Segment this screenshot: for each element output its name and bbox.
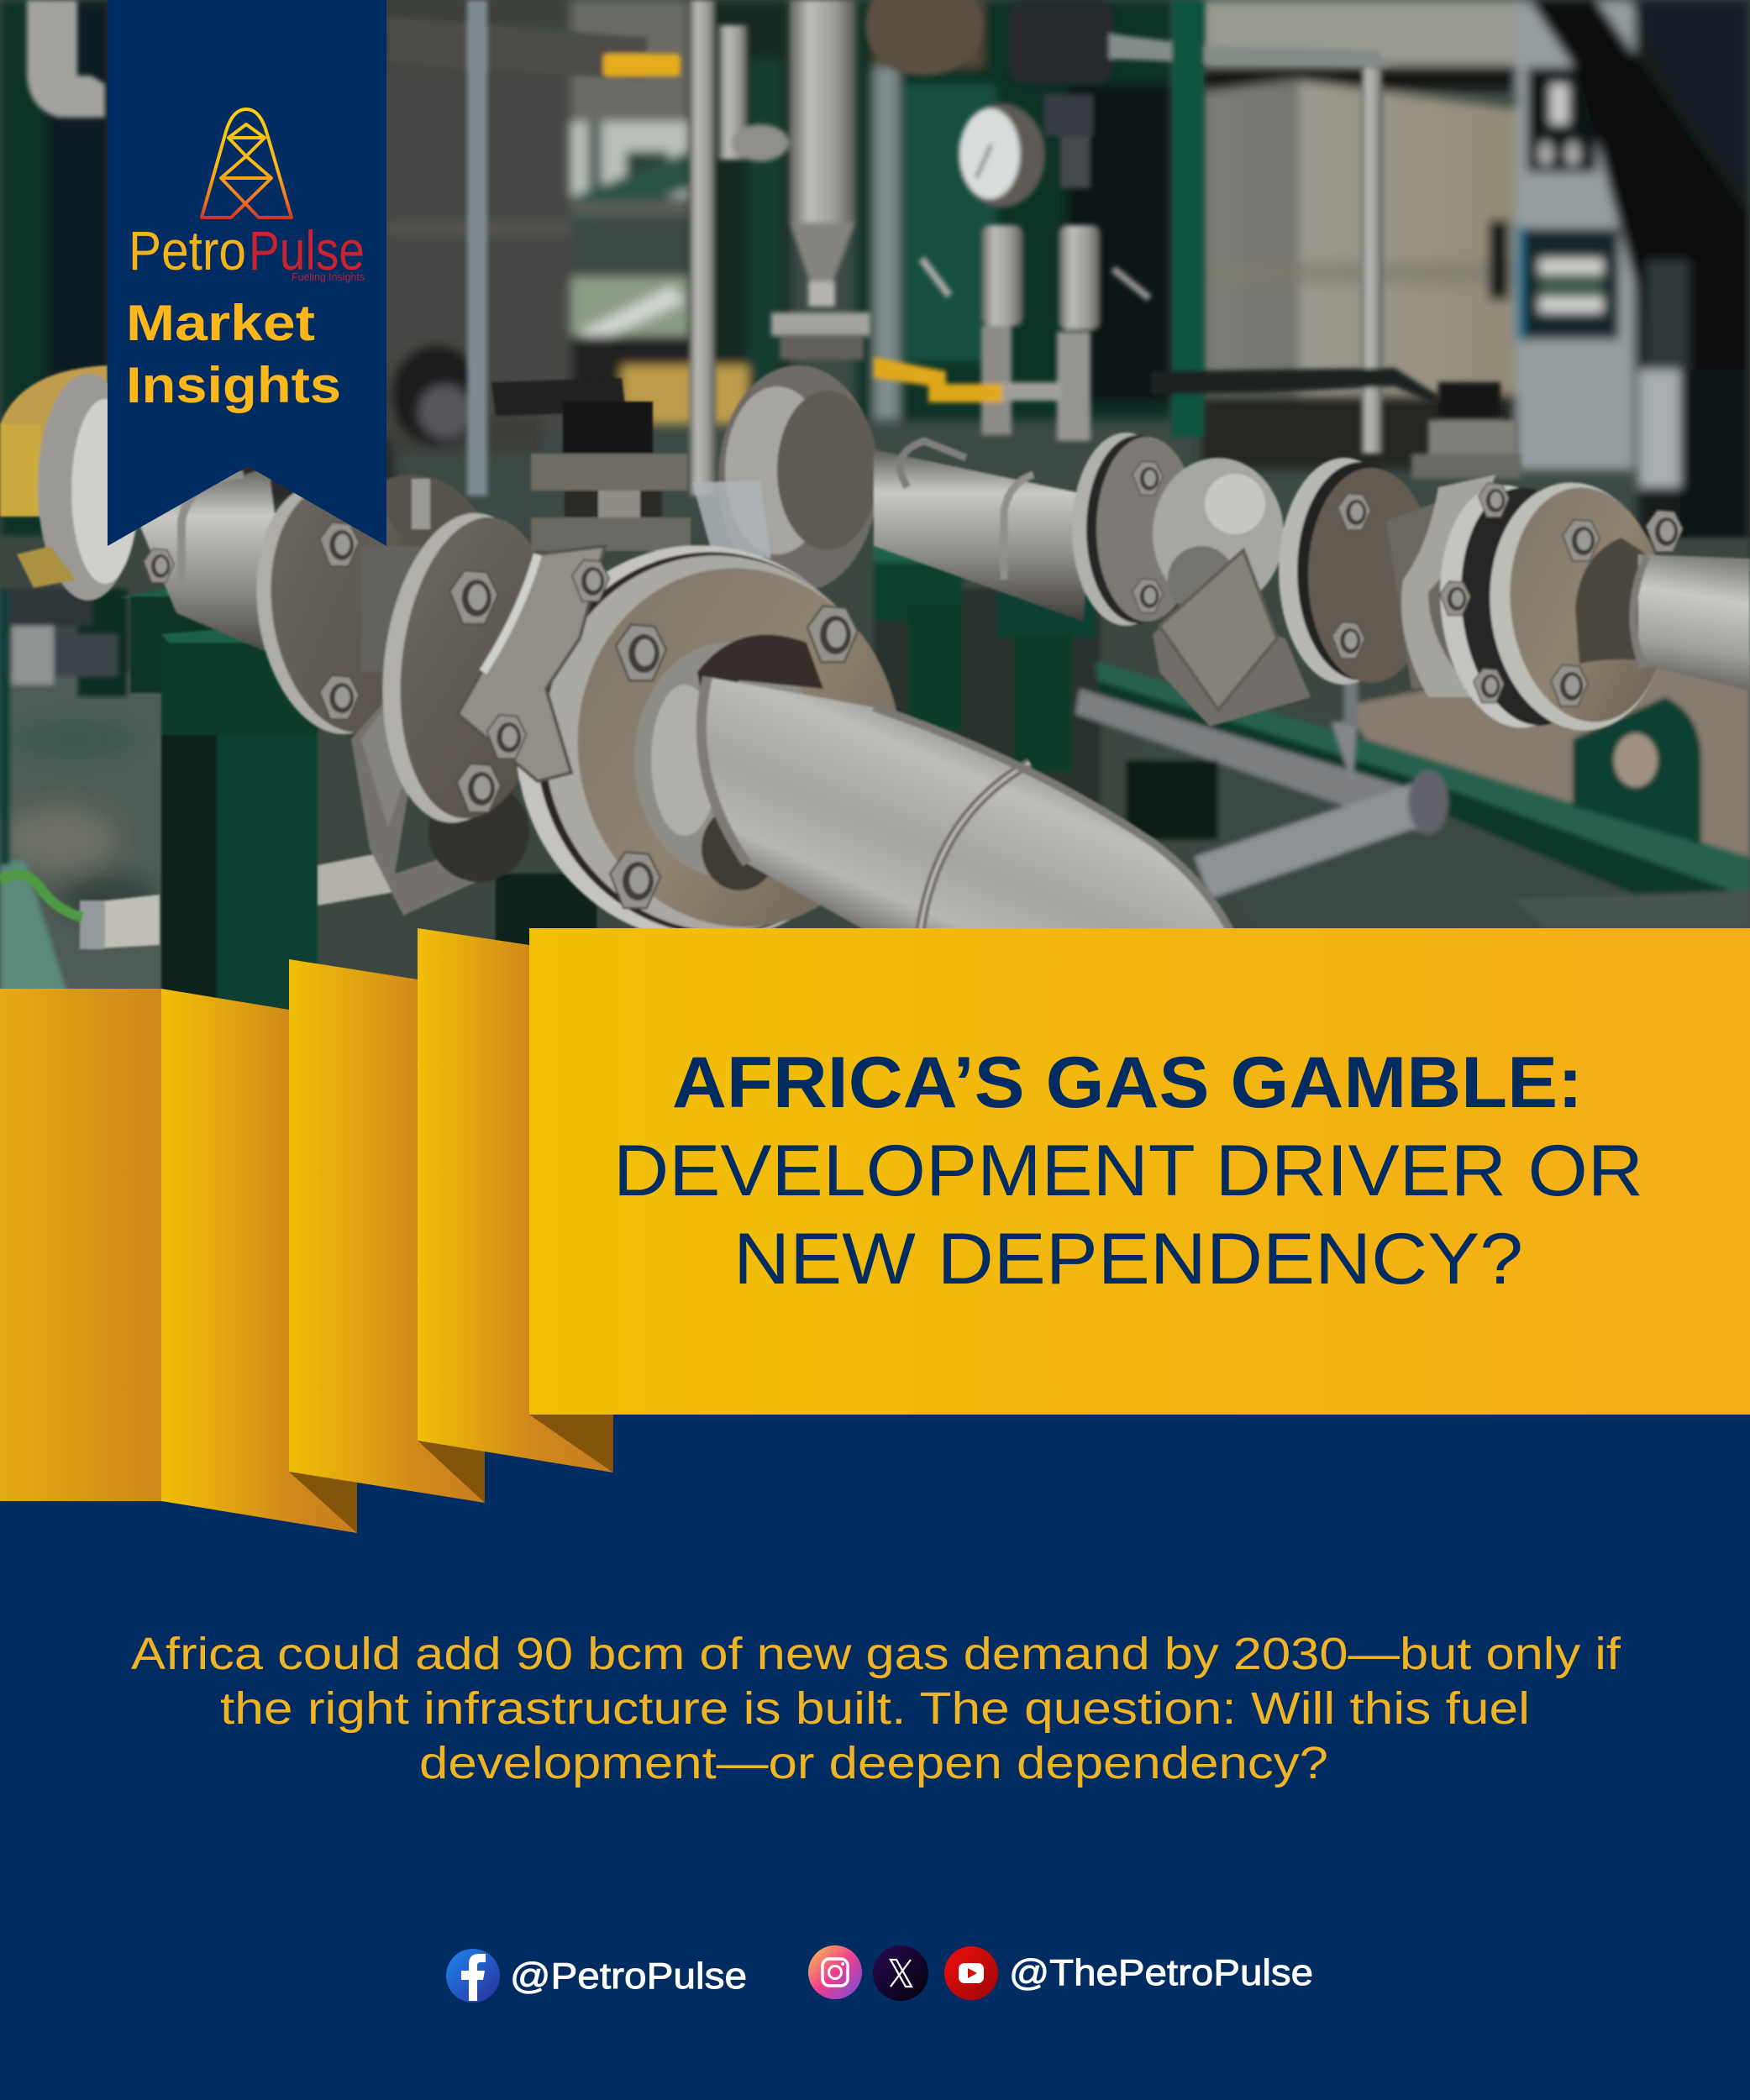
title text xyxy=(613,1042,1643,1299)
floor and rails xyxy=(0,538,1750,1021)
gauge xyxy=(958,103,1045,207)
hub xyxy=(634,643,819,878)
folded ribbon behind title xyxy=(0,928,613,1533)
far pipeline: flanges, strainer, valve and outlet pipe xyxy=(718,365,1750,739)
summary paragraph: development—or deepen dependency? xyxy=(419,1738,1328,1788)
grey conduit xyxy=(1075,689,1428,832)
icon: x xyxy=(873,1945,928,2001)
logo wordmark: Petro xyxy=(129,219,246,281)
logo wordmark: Pulse xyxy=(249,219,365,281)
yellow pump and flange xyxy=(0,365,108,504)
instrument valves xyxy=(981,225,1023,326)
conduit pipes xyxy=(467,0,487,496)
handle: instagram, x, youtube: @ThePetroPulse xyxy=(1009,1952,1313,1993)
title text: NEW DEPENDENCY? xyxy=(733,1219,1523,1299)
summary paragraph xyxy=(131,1629,1621,1788)
near green stands xyxy=(118,586,596,1021)
icon: youtube xyxy=(944,1946,998,2000)
valve link plates xyxy=(458,546,605,781)
banner heading: Market xyxy=(126,295,315,351)
banner heading xyxy=(126,295,341,413)
bracket with hole xyxy=(1573,697,1701,844)
lower pipes xyxy=(84,895,160,949)
handle: facebook: @PetroPulse xyxy=(510,1956,747,1997)
flanges xyxy=(323,475,500,701)
navy lower background xyxy=(0,1260,1750,2100)
cabinet xyxy=(1203,0,1522,67)
big flange xyxy=(490,521,915,966)
summary paragraph: the right infrastructure is built. The question: Will this fuel xyxy=(220,1683,1530,1734)
title panel xyxy=(529,928,1750,1415)
title text: DEVELOPMENT DRIVER OR xyxy=(613,1131,1643,1211)
icon: facebook xyxy=(446,1949,500,2003)
nameplate xyxy=(351,704,521,916)
column silver xyxy=(790,0,855,223)
near pipeline: pump flange, pipes, valve and big elbow xyxy=(0,365,1231,966)
mid-focus vertical pipes and instruments xyxy=(27,0,1521,496)
social footer xyxy=(446,1945,1313,2003)
summary paragraph: Africa could add 90 bcm of new gas demand by 2030—but only if xyxy=(131,1629,1621,1679)
banner heading: Insights xyxy=(126,357,341,413)
left elbow xyxy=(27,0,105,118)
short pipe xyxy=(134,466,294,664)
blurred background machinery xyxy=(0,0,1750,588)
yellow pump behind xyxy=(622,365,748,424)
right panel xyxy=(1516,0,1634,470)
bolts xyxy=(616,625,666,680)
dark top fittings xyxy=(865,0,983,76)
top pipe xyxy=(386,17,647,80)
logo: oil derrick tower xyxy=(202,109,292,218)
logo wordmark xyxy=(129,219,365,283)
icon: instagram xyxy=(808,1945,862,1999)
big elbow pipe xyxy=(701,677,1231,932)
banner: navy ribbon with logo xyxy=(108,0,386,546)
logo wordmark: Fueling Insights xyxy=(292,271,365,283)
black lever xyxy=(1151,368,1437,405)
far green stands xyxy=(874,538,949,567)
title text: AFRICA’S GAS GAMBLE: xyxy=(672,1042,1583,1123)
photo: industrial gas pipeline with valves and flanges xyxy=(0,0,1750,1021)
valve stem and body xyxy=(491,378,626,416)
